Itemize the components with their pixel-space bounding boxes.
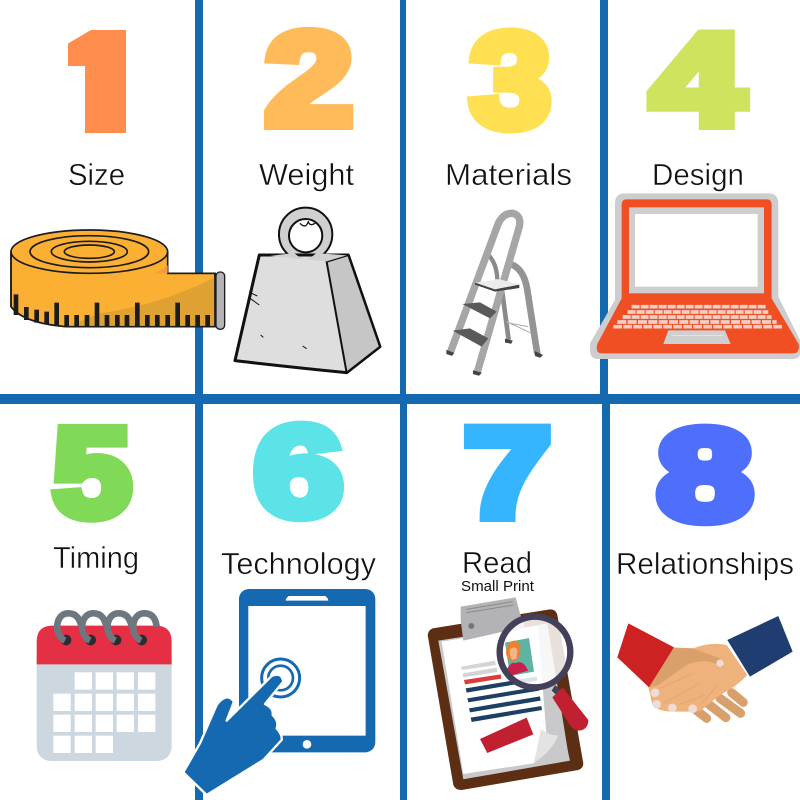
heading: read: Read [462, 545, 532, 580]
number 7: 7 [464, 402, 551, 544]
icon: calendar [37, 613, 172, 761]
heading: technology: Technology [221, 546, 376, 581]
number 6: 6 [254, 400, 343, 544]
number 5: 5 [53, 402, 131, 543]
number 4: 4 [651, 6, 744, 152]
number 2: 2 [265, 6, 353, 152]
icon: clipboard and magnifier [428, 597, 588, 790]
heading: weight: Weight [259, 157, 354, 192]
heading: timing: Timing [53, 540, 139, 575]
panel: relationships [616, 404, 794, 718]
number 8: 8 [658, 404, 752, 547]
icon: weight [235, 208, 380, 373]
panel: weight [235, 6, 380, 373]
icon: tablet and hand [183, 589, 375, 795]
icon: laptop [590, 193, 800, 359]
heading: materials: Materials [445, 157, 572, 192]
heading: design: Design [652, 157, 744, 192]
icon: step ladder [447, 213, 541, 375]
heading: size: Size [68, 157, 125, 192]
panel: size [11, 12, 225, 329]
heading: relationships: Relationships [616, 546, 794, 581]
number 3: 3 [470, 6, 551, 156]
number 1: 1 [62, 12, 146, 166]
panel: timing [37, 402, 172, 761]
panel: design [590, 6, 800, 359]
icon: tape measure [11, 230, 225, 329]
subheading: small print: Small Print [461, 579, 534, 595]
panel: technology [183, 400, 376, 795]
panel: materials [445, 6, 572, 375]
panel: read small print [428, 402, 588, 790]
icon: handshake [617, 616, 793, 718]
